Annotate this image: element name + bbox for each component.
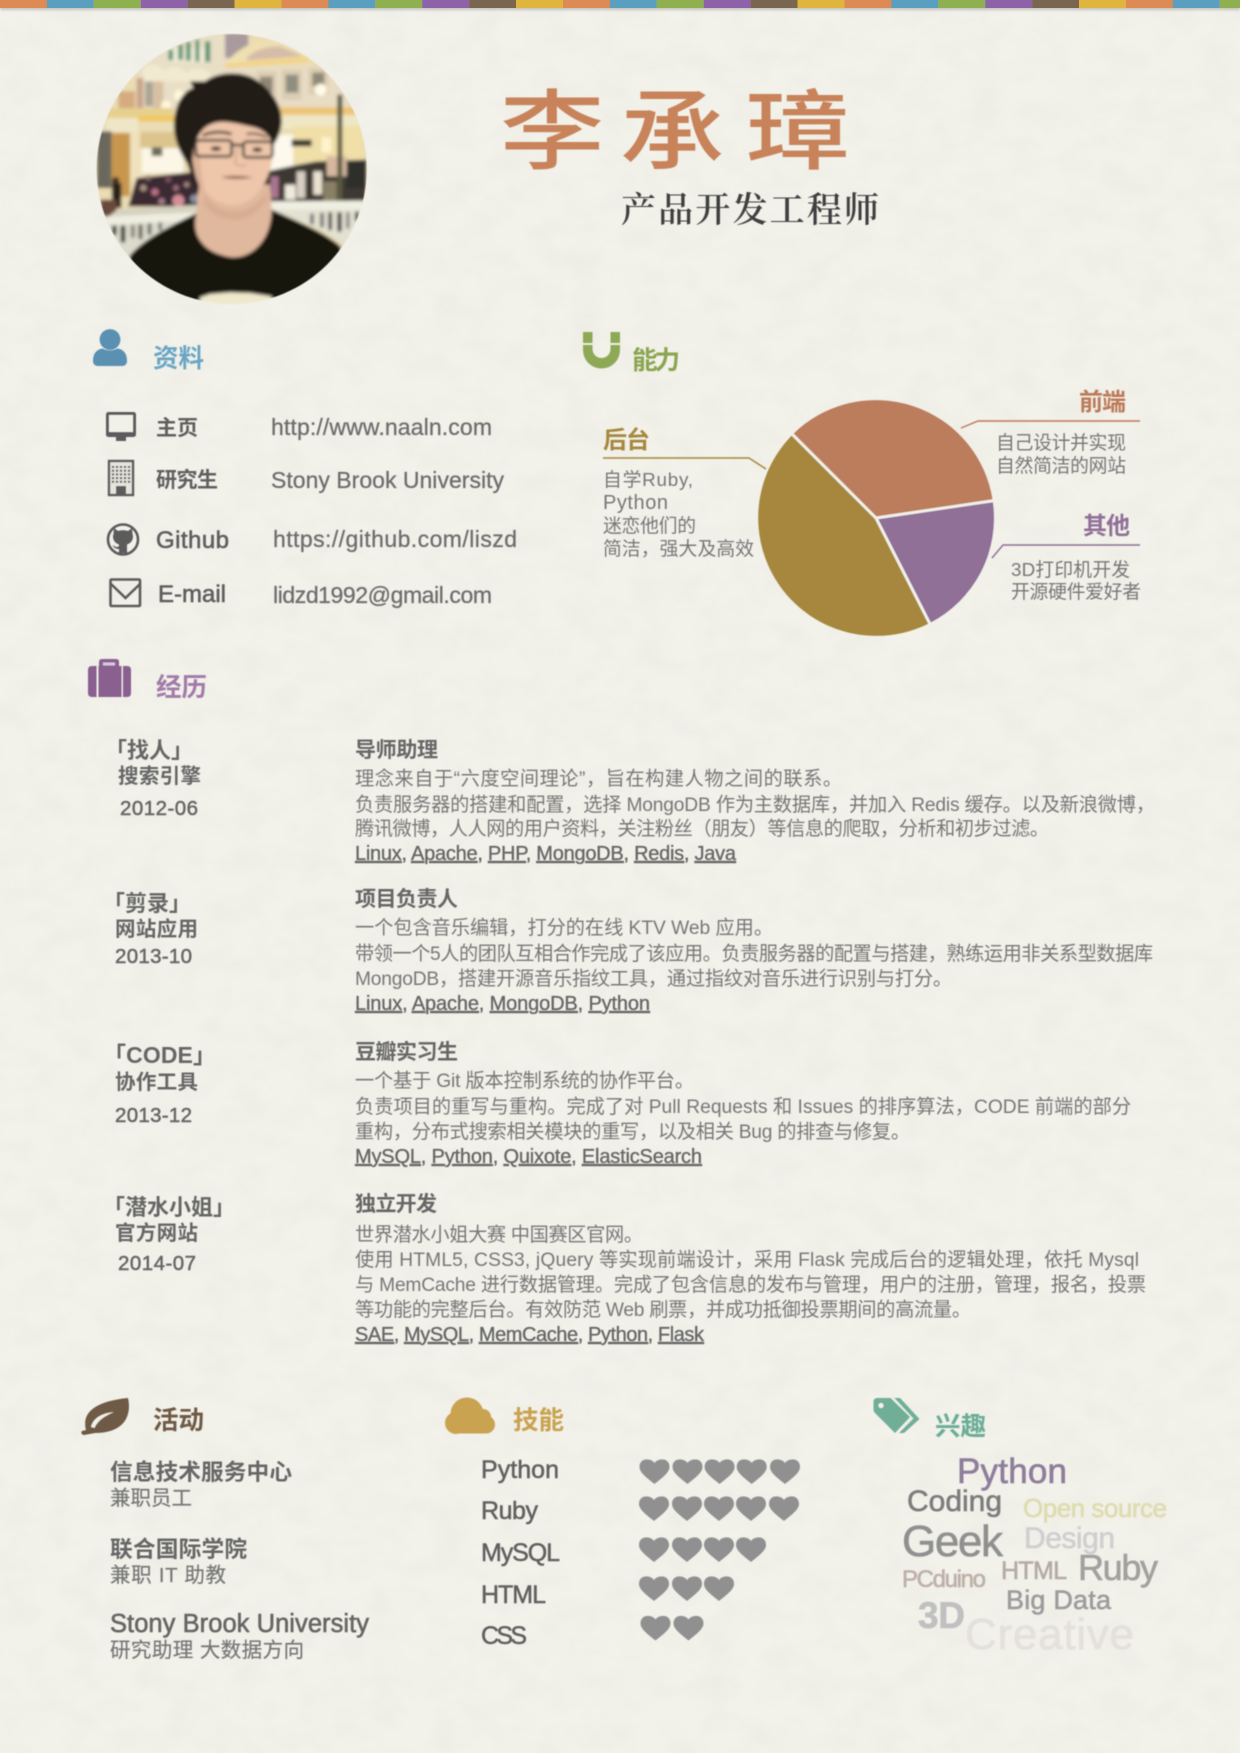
entry: search engine: 2012-06 (120, 797, 198, 820)
word cloud: Creative (965, 1610, 1134, 1659)
entry: audio clip: 2013-10 (115, 945, 192, 968)
section: experience (88, 659, 1155, 1346)
value: university: Stony Brook University (271, 467, 504, 493)
word cloud: Geek (902, 1517, 1004, 1566)
entry: search engine: 理念来自于“六度空间理论”，旨在构建人物之间的联系。 (355, 767, 842, 790)
activity: Stony Brook (110, 1610, 369, 1662)
icon: building (109, 461, 133, 495)
entry: CODE: 「CODE」 (103, 1042, 216, 1068)
value: homepage: http://www.naaln.com (271, 414, 492, 440)
top colour stripe (0, 0, 1240, 10)
entry: Miss Scuba: 「潜水小姐」 (103, 1195, 235, 1220)
callout: backend (603, 426, 766, 559)
word cloud: 3D (918, 1595, 965, 1636)
job title: 产品开发工程师 (621, 183, 879, 233)
callout: other: 其他 (1083, 513, 1130, 540)
icon: monitor (106, 412, 136, 441)
icon: tags (874, 1398, 920, 1433)
entry: search engine: 负责服务器的搭建和配置，选择 MongoDB 作为主数据库，并加入 Redis 缓存。以及新浪微博， (355, 794, 1155, 816)
icon: github (108, 524, 138, 554)
entry: Miss Scuba: 2014-07 (118, 1252, 196, 1275)
entry: CODE: MySQL, Python, Quixote, ElasticSearch (355, 1146, 702, 1168)
skill names: HTML (481, 1581, 546, 1609)
heading: ability: 能力 (632, 347, 680, 375)
skill names (481, 1456, 560, 1650)
entry: CODE: 豆瓣实习生 (355, 1040, 458, 1064)
heading: experience: 经历 (156, 674, 207, 702)
activity: IT service centre: 兼职员工 (110, 1487, 192, 1510)
entry: Miss Scuba: 使用 HTML5, CSS3, jQuery 等实现前端设计，采用 Flask 完成后台的逻辑处理，依托 Mysql (355, 1249, 1139, 1271)
entry: audio clip: MongoDB，搭建开源音乐指纹工具，通过指纹对音乐进行识别与打分。 (355, 968, 952, 990)
word cloud: Big Data (1006, 1585, 1112, 1615)
icon: suitcase (88, 659, 131, 697)
entry: audio clip: Linux, Apache, MongoDB, Python (355, 993, 650, 1015)
entry: Miss Scuba: SAE, MySQL, MemCache, Python, Flask (355, 1324, 705, 1346)
word cloud: Open source (1023, 1493, 1167, 1523)
skill names: CSS (481, 1622, 527, 1650)
callout: other: 3D打印机开发 (1011, 559, 1130, 580)
icon: person (93, 329, 127, 366)
entry: audio clip: 项目负责人 (355, 888, 458, 911)
label: github: Github (156, 527, 229, 554)
value: github url: https://github.com/liszd (273, 526, 517, 552)
icon: magnet (583, 332, 620, 368)
entry: CODE: 负责项目的重写与重构。完成了对 Pull Requests 和 Issues 的排序算法，CODE 前端的部分 (355, 1096, 1131, 1118)
skill names: Ruby (481, 1497, 538, 1525)
pie chart (758, 400, 994, 636)
icon: cloud (445, 1398, 495, 1434)
heading: interests: 兴趣 (935, 1413, 986, 1441)
entry: audio clip (103, 888, 1153, 1015)
word cloud: Ruby (1078, 1547, 1158, 1588)
section: profile (93, 329, 517, 608)
word cloud: PCduino (902, 1566, 986, 1593)
callout: frontend: 前端 (1079, 389, 1126, 416)
callout: backend: 简洁，强大及高效 (603, 538, 754, 559)
label: graduate: 研究生 (156, 468, 218, 492)
entry: search engine: Linux, Apache, PHP, MongoDB, Redis, Java (355, 843, 737, 865)
entry: search engine: 搜索引擎 (118, 765, 201, 788)
heading: activities: 活动 (153, 1407, 204, 1435)
entry: audio clip: 「剪录」 (103, 891, 191, 916)
entry: search engine: 腾讯微博，人人网的用户资料，关注粉丝（朋友）等信息的爬取，分析和初步过滤。 (355, 818, 1049, 840)
callout: frontend: 自己设计并实现 (996, 432, 1126, 453)
entry: Miss Scuba: 独立开发 (355, 1192, 437, 1216)
callout: backend: 后台 (603, 426, 650, 454)
section: ability (583, 332, 1141, 636)
callout: backend: 迷恋他们的 (603, 515, 696, 536)
entry: Miss Scuba: 官方网站 (115, 1221, 198, 1245)
icon: leaf (81, 1398, 129, 1435)
entry: Miss Scuba: 与 MemCache 进行数据管理。完成了包含信息的发布与管理，用户的注册，管理，报名，投票 (355, 1274, 1146, 1296)
callout: frontend: 自然简洁的网站 (996, 455, 1126, 476)
word cloud: Python (957, 1452, 1067, 1491)
entry: Miss Scuba: 等功能的完整后台。有效防范 Web 刷票，并成功抵御投票期间的高流量。 (355, 1299, 971, 1321)
section: activities (81, 1398, 369, 1662)
section: interests (874, 1398, 1167, 1659)
entry: audio clip: 一个包含音乐编辑，打分的在线 KTV Web 应用。 (355, 917, 773, 939)
activity: IT service centre: 信息技术服务中心 (110, 1459, 292, 1485)
entry: Miss Scuba: 世界潜水小姐大赛 中国赛区官网。 (355, 1224, 643, 1246)
callout: other (992, 513, 1141, 602)
activity: international college: 联合国际学院 (110, 1536, 247, 1562)
skill names: Python (481, 1456, 559, 1484)
activity: Stony Brook: 研究助理 大数据方向 (110, 1639, 304, 1662)
activity: Stony Brook: Stony Brook University (110, 1610, 369, 1638)
value: email: lidzd1992@gmail.com (273, 582, 492, 608)
label: homepage: 主页 (156, 417, 198, 440)
entry: CODE: 协作工具 (115, 1071, 198, 1094)
heading: skills: 技能 (513, 1407, 564, 1435)
portrait photo (90, 28, 375, 315)
entry: audio clip: 网站应用 (115, 917, 198, 941)
word cloud (902, 1452, 1167, 1659)
word cloud: Design (1024, 1522, 1115, 1555)
section: skills (445, 1398, 800, 1650)
entry: CODE (103, 1040, 1131, 1168)
entry: CODE: 2013-12 (115, 1104, 192, 1127)
skill names: MySQL (481, 1539, 560, 1567)
label: email: E-mail (158, 581, 226, 608)
skill hearts (639, 1459, 800, 1640)
callout: frontend (961, 389, 1140, 476)
callout: other: 开源硬件爱好者 (1011, 581, 1141, 602)
activity: international college (110, 1536, 247, 1587)
entry: Miss Scuba (103, 1192, 1146, 1346)
entry: search engine (105, 738, 1155, 865)
heading: profile: 资料 (153, 345, 204, 373)
activity: IT service centre (110, 1459, 292, 1510)
activity: international college: 兼职 IT 助教 (110, 1564, 226, 1587)
name: 李承璋 (500, 84, 849, 181)
icon: mail (110, 580, 140, 606)
entry: audio clip: 带领一个5人的团队互相合作完成了该应用。负责服务器的配置与搭建，熟练运用非关系型数据库 (355, 943, 1153, 965)
callout: backend: 自学Ruby, (603, 469, 693, 490)
entry: search engine: 导师助理 (355, 739, 438, 762)
entry: CODE: 一个基于 Git 版本控制系统的协作平台。 (355, 1070, 694, 1092)
entry: CODE: 重构，分布式搜索相关模块的重写，以及相关 Bug 的排查与修复。 (355, 1121, 910, 1143)
entry: search engine: 「找人」 (105, 738, 193, 763)
word cloud: HTML (1001, 1557, 1067, 1585)
word cloud: Coding (907, 1485, 1002, 1518)
callout: backend: Python (603, 492, 668, 514)
